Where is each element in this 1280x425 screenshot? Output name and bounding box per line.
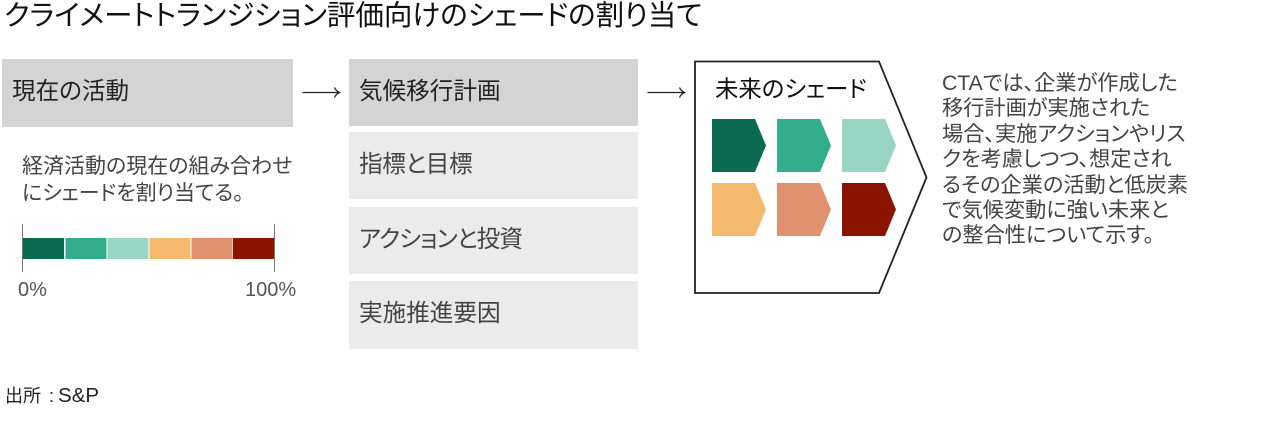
title: クライメートトランジション評価向けのシェードの割り当て bbox=[4, 0, 703, 32]
heading: current activities: 現在の活動 bbox=[12, 79, 129, 105]
text: CTA explanation: 場合、実施アクションやリス bbox=[942, 123, 1185, 146]
arrow: current to plan bbox=[302, 87, 341, 98]
text: description: にシェードを割り当てる。 bbox=[22, 182, 244, 205]
label: 100%: 100% bbox=[245, 279, 296, 301]
chart: stacked shade bar bbox=[22, 224, 275, 272]
heading: future shades: 未来のシェード bbox=[715, 76, 867, 102]
heading: climate transition plan: 気候移行計画 bbox=[359, 79, 501, 105]
item: actions and investment: アクションと投資 bbox=[359, 227, 522, 253]
panel: current activities bbox=[2, 59, 296, 301]
text: CTA explanation: 移行計画が実施された bbox=[942, 97, 1150, 120]
shade tiles bbox=[712, 119, 896, 236]
panel: future shades bbox=[694, 60, 928, 294]
text: CTA explanation: で気候変動に強い未来と bbox=[942, 199, 1169, 222]
item: implementation drivers: 実施推進要因 bbox=[359, 301, 501, 327]
item: metrics and targets bbox=[349, 132, 638, 199]
heading: climate transition plan bbox=[349, 59, 638, 126]
arrow: plan to future bbox=[648, 87, 686, 98]
text: CTA explanation: の整合性について示す。 bbox=[942, 224, 1154, 247]
outline: pentagon arrow bbox=[694, 60, 928, 294]
item: metrics and targets: 指標と目標 bbox=[359, 152, 472, 178]
text: CTA explanation bbox=[942, 72, 1188, 247]
heading: current activities bbox=[2, 59, 293, 127]
label: 0%: 0% bbox=[18, 279, 47, 301]
text: description bbox=[22, 155, 292, 205]
item: implementation drivers bbox=[349, 281, 638, 349]
item: actions and investment bbox=[349, 207, 638, 274]
source note: 出所 :S&P bbox=[5, 384, 99, 407]
panel: climate transition plan bbox=[349, 59, 638, 349]
text: CTA explanation: るその企業の活動と低炭素 bbox=[942, 174, 1188, 197]
text: description: 経済活動の現在の組み合わせ bbox=[22, 155, 292, 178]
text: CTA explanation: CTAでは、企業が作成した bbox=[942, 72, 1178, 95]
text: CTA explanation: クを考慮しつつ、想定され bbox=[942, 148, 1172, 171]
